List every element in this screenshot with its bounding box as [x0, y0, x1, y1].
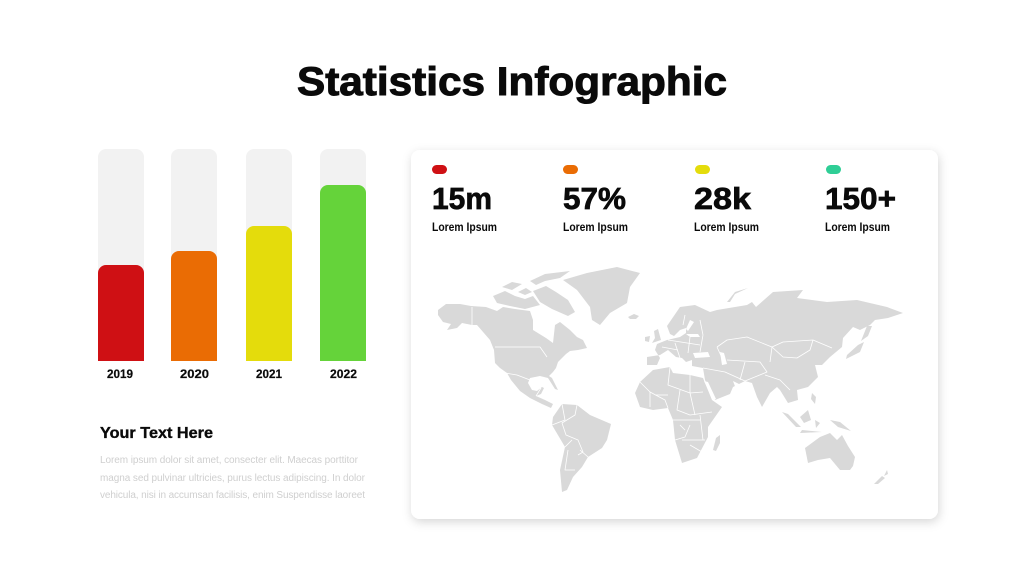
stat: 57%: 57%: [563, 181, 626, 216]
stat: 150+: Lorem Ipsum: [825, 222, 890, 234]
bar 2021: 2021: [256, 369, 283, 381]
Sakhalin: [861, 326, 872, 341]
stat: 57%: [563, 165, 628, 234]
stat: 150+: 150+: [825, 181, 896, 216]
body text: [100, 455, 366, 501]
bar 2019: 2019: [107, 369, 133, 381]
stat: 150+: [825, 165, 896, 234]
Eurasia: [647, 290, 903, 407]
New Zealand: [874, 470, 888, 484]
country borders: [472, 307, 832, 470]
North America: [438, 304, 587, 408]
Madagascar: [713, 435, 720, 451]
bar 2022: [320, 149, 366, 381]
text block: [100, 425, 366, 501]
bar 2021: [246, 149, 292, 381]
world map: [438, 267, 903, 492]
Novaya Zemlya: [727, 288, 748, 302]
panel: map card: [411, 150, 938, 519]
Greenland: [563, 267, 640, 325]
bar chart: [98, 149, 366, 381]
text heading: Your Text Here: [100, 425, 213, 442]
bar 2019: [98, 149, 144, 381]
stat: 57%: Lorem Ipsum: [563, 222, 628, 234]
body text: Lorem ipsum dolor sit amet, consecter elit. Maecas porttitor: [100, 455, 359, 466]
Iceland: [628, 314, 639, 319]
inland seas: [686, 320, 743, 400]
stat: 28k: 28k: [694, 181, 752, 216]
body text: vehicula, nisi in accumsan facilisis, enim Suspendisse laoreet: [100, 490, 365, 501]
stat: 15m: 15m: [432, 181, 492, 216]
Australia: [805, 433, 855, 470]
bar 2020: 2020: [180, 369, 209, 381]
body text: magna sed pulvinar ultricies, purus lectus adipiscing. In dolor: [100, 473, 366, 484]
bar 2020: [171, 149, 217, 381]
Arctic islands: [493, 271, 575, 316]
UK and Ireland: [645, 329, 661, 343]
title: Statistics Infographic: [297, 60, 727, 104]
stat: 28k: Lorem Ipsum: [694, 222, 759, 234]
Japan: [846, 342, 864, 359]
Southeast Asia islands: [782, 393, 851, 433]
stat: 15m: Lorem Ipsum: [432, 222, 497, 234]
Africa: [635, 367, 722, 463]
stat: 15m: [432, 165, 497, 234]
stat: 28k: [694, 165, 759, 234]
South America: [552, 404, 611, 492]
bar 2022: 2022: [330, 369, 357, 381]
